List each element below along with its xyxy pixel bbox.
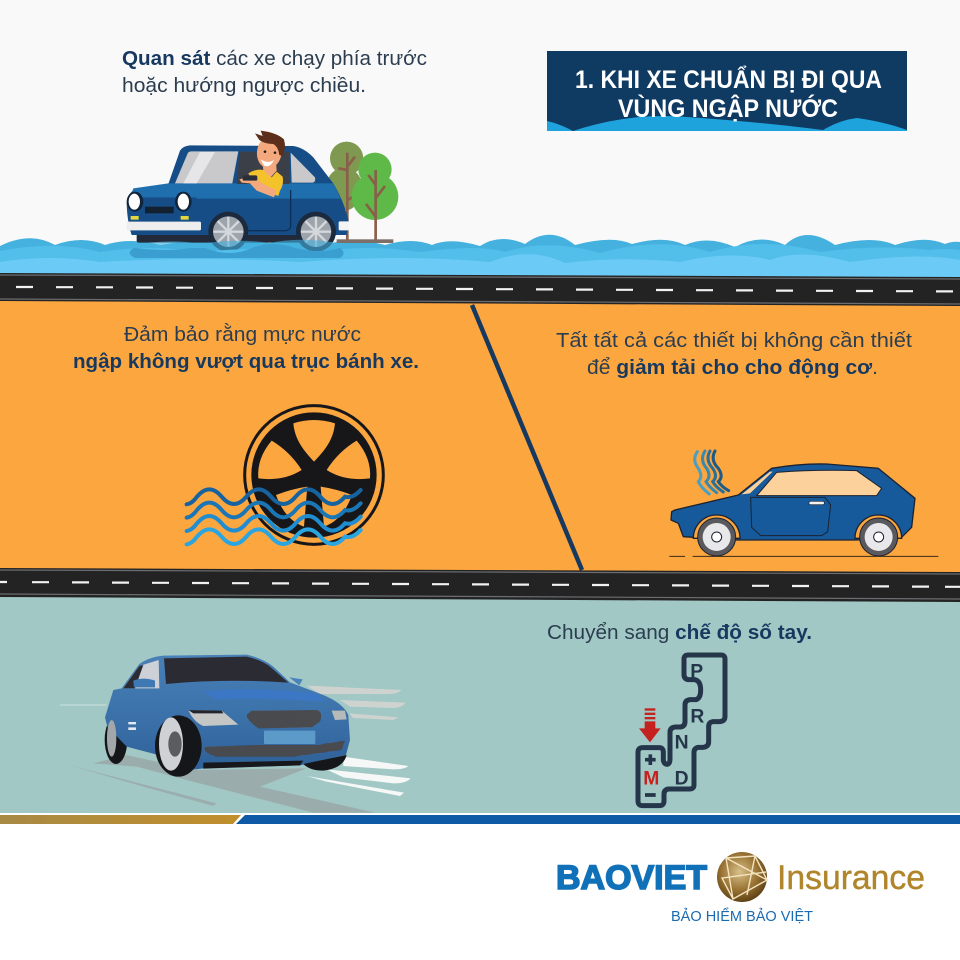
heading banner: VÙNG NGẬP NƯỚC xyxy=(618,93,838,123)
headlights xyxy=(188,710,238,726)
heading banner: 1. KHI XE CHUẨN BỊ ĐI QUA xyxy=(575,65,882,94)
rear wheel xyxy=(855,515,902,556)
footer stripes xyxy=(0,813,960,824)
sports car with spray xyxy=(60,655,411,813)
front wheel xyxy=(208,212,248,252)
car body xyxy=(105,655,350,772)
front wheel xyxy=(155,715,202,777)
text: observe vehicles xyxy=(122,48,427,97)
cabin opening xyxy=(237,152,289,184)
wheel xyxy=(245,406,383,544)
ground line xyxy=(669,555,938,558)
lower grille xyxy=(204,741,345,757)
icon: gear shifter xyxy=(638,655,725,806)
body xyxy=(671,464,915,540)
front wheel xyxy=(693,515,740,556)
text: observe vehicles: hoặc hướng ngược chiều. xyxy=(122,75,366,97)
gear letters: D xyxy=(675,768,689,789)
car with driver xyxy=(127,131,349,252)
lighter hood stripe xyxy=(130,183,341,199)
gear letters xyxy=(643,661,704,789)
door xyxy=(751,497,831,536)
driver xyxy=(239,131,285,197)
license plate xyxy=(264,731,315,744)
heading banner xyxy=(547,51,907,131)
gear letters: M xyxy=(643,768,659,789)
globe xyxy=(717,852,767,902)
red down arrow xyxy=(639,708,661,742)
hood highlight xyxy=(202,690,325,702)
grille and fog lights xyxy=(145,207,174,213)
logo: Bao Viet Insurance: Insurance xyxy=(777,859,925,897)
side mirrors xyxy=(133,679,155,687)
water front wave xyxy=(0,254,960,280)
plus and minus marks xyxy=(645,754,656,795)
right front tire xyxy=(303,755,347,771)
text: reduce load: để giảm tải cho cho động cơ . xyxy=(587,357,878,379)
rear window xyxy=(291,153,315,183)
icon: trees xyxy=(327,142,398,243)
car body xyxy=(127,145,349,235)
side window xyxy=(123,660,159,688)
text: reduce load xyxy=(556,330,912,379)
panel: footer xyxy=(0,824,960,960)
panel: top sky background xyxy=(0,0,960,276)
road upper xyxy=(0,273,960,306)
text: observe vehicles: Quan sát các xe chạy phía trước xyxy=(122,48,427,70)
headlights xyxy=(127,192,143,212)
under bumper xyxy=(203,761,303,769)
panel: teal section xyxy=(0,594,960,813)
logo: Bao Viet Insurance: BẢO HIỂM BẢO VIỆT xyxy=(671,907,813,925)
text: water level: Đảm bảo rằng mực nước xyxy=(124,323,361,346)
logo: Bao Viet Insurance: BAOVIET xyxy=(556,859,707,897)
waves xyxy=(187,489,361,544)
diagonal divider xyxy=(472,305,582,570)
heat waves xyxy=(695,451,729,494)
grille xyxy=(247,710,321,728)
water tint over car xyxy=(128,240,345,258)
rear wheel xyxy=(296,212,336,252)
windshield xyxy=(175,151,238,183)
water middle wave xyxy=(0,244,960,280)
motion streaks xyxy=(60,686,411,806)
side vent xyxy=(128,722,136,730)
rear rim xyxy=(107,720,116,757)
icon: hatchback car with engine heat xyxy=(669,451,938,556)
gear letters: R xyxy=(690,706,704,727)
door line xyxy=(247,190,291,231)
rear wheel xyxy=(105,716,127,764)
gear letters: N xyxy=(675,732,689,753)
windshield xyxy=(164,657,288,684)
bumpers xyxy=(127,222,201,230)
panel: orange section xyxy=(0,298,960,576)
text: reduce load: Tất tất cả các thiết bị không cần thiết xyxy=(556,330,912,352)
car reflection in water xyxy=(130,244,344,258)
car under-body xyxy=(137,233,333,243)
gear letters: P xyxy=(690,661,703,682)
window xyxy=(757,470,882,496)
water back wave xyxy=(0,235,960,280)
windshield strip xyxy=(742,472,773,494)
text: water level: ngập không vượt qua trục bánh xe. xyxy=(73,351,419,373)
logo: Bao Viet Insurance xyxy=(556,852,925,925)
text: manual mode: Chuyển sang chế độ số tay. xyxy=(547,622,812,644)
road shadow xyxy=(93,755,375,813)
road lower xyxy=(0,568,960,602)
text: water level xyxy=(73,323,419,373)
icon: wheel in waves xyxy=(187,406,383,544)
